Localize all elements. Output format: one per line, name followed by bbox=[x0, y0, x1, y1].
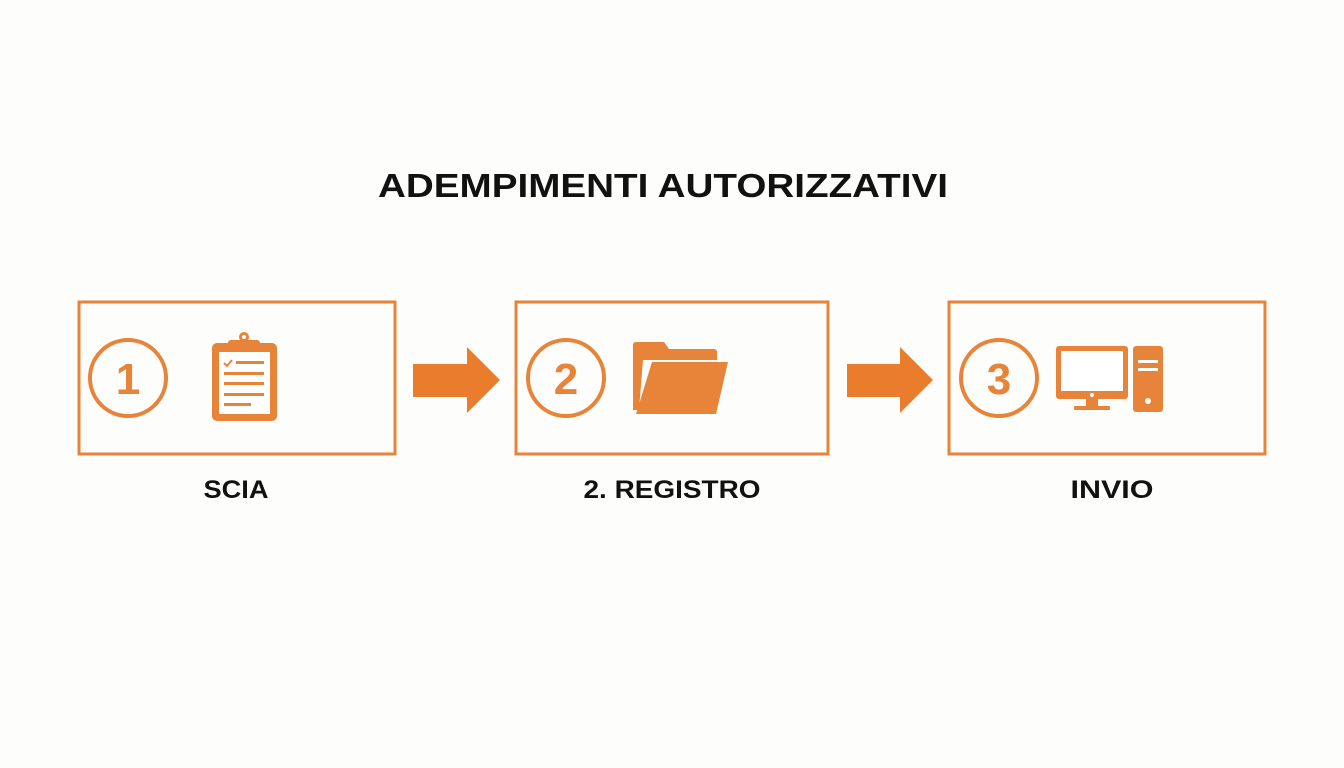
number circle 3: 3 bbox=[987, 355, 1011, 404]
icon: computer bbox=[1056, 346, 1163, 412]
number circle 1 bbox=[90, 340, 166, 416]
icon: clipboard bbox=[212, 332, 277, 421]
arrow 1 bbox=[413, 347, 500, 413]
number circle 3 bbox=[961, 340, 1037, 416]
label: 2. REGISTRO: 2. REGISTRO bbox=[584, 476, 760, 504]
arrow 2 bbox=[847, 347, 933, 413]
title: ADEMPIMENTI AUTORIZZATIVI bbox=[378, 167, 948, 204]
label: INVIO: INVIO bbox=[1070, 476, 1154, 504]
panel: step 2 bbox=[516, 302, 828, 454]
panel: step 1 bbox=[79, 302, 395, 454]
panel: step 3 bbox=[949, 302, 1265, 454]
number circle 1: 1 bbox=[116, 355, 140, 404]
number circle 2 bbox=[528, 340, 604, 416]
number circle 2: 2 bbox=[554, 355, 578, 404]
icon: folder bbox=[633, 342, 728, 414]
label: SCIA: SCIA bbox=[204, 476, 268, 504]
